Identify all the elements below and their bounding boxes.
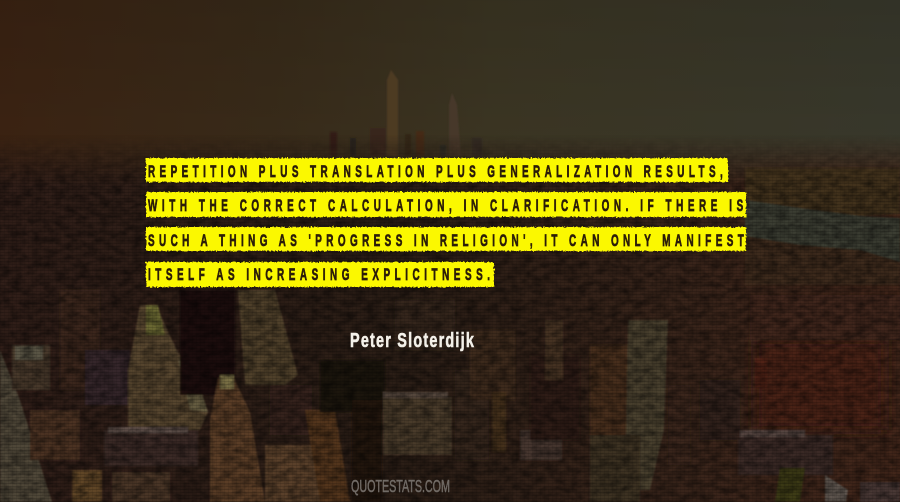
quote text: REPETITION PLUS TRANSLATION PLUS GENERALIZATION RESULTS, xyxy=(148,162,723,181)
quote text: ITSELF AS INCREASING EXPLICITNESS. xyxy=(148,265,490,284)
far shore and river xyxy=(745,168,900,285)
city blocks: left xyxy=(0,290,350,502)
city blocks: right xyxy=(700,295,900,502)
quote text xyxy=(148,162,744,284)
background: city base xyxy=(0,130,900,502)
watermark: QUOTESTATS.COM xyxy=(351,477,450,497)
quote highlight bars xyxy=(146,158,746,287)
skyline towers xyxy=(330,70,482,156)
quote text: SUCH A THING AS 'PROGRESS IN RELIGION', IT CAN ONLY MANIFEST xyxy=(148,231,744,250)
author name: Peter Sloterdijk xyxy=(350,329,474,352)
quote text: WITH THE CORRECT CALCULATION, IN CLARIFICATION. IF THERE IS xyxy=(148,196,743,215)
city blocks: centre xyxy=(320,300,690,502)
background: sky xyxy=(0,0,900,200)
city texture xyxy=(0,130,900,502)
